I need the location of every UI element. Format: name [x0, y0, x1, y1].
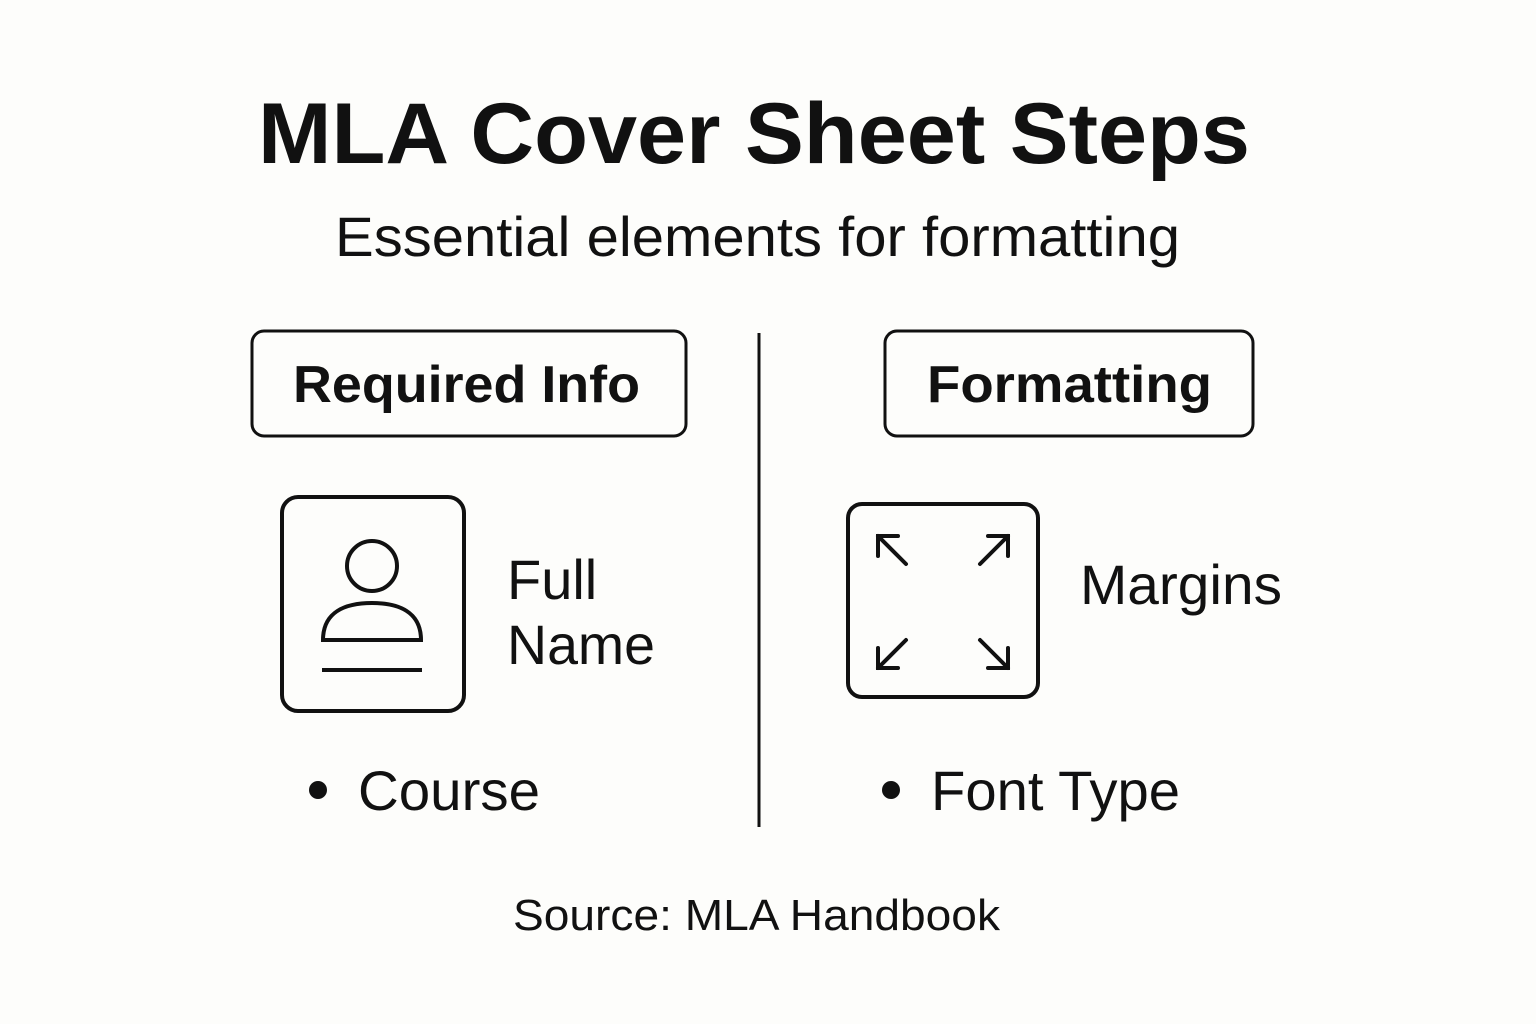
title: MLA Cover Sheet Steps: [258, 86, 1250, 182]
label: Full Name: [507, 548, 655, 676]
icon: person card: [282, 497, 464, 711]
heading box: Formatting: Formatting: [927, 356, 1212, 414]
icon: margins: [848, 504, 1038, 697]
subtitle: Essential elements for formatting: [335, 205, 1180, 268]
source: Source: MLA Handbook: [513, 891, 1001, 940]
heading box: Formatting: [885, 331, 1253, 436]
panel: formatting: [848, 331, 1282, 822]
label: Full Name: Full: [507, 548, 597, 611]
label: Full Name: Name: [507, 613, 655, 676]
panel: required info: [252, 331, 686, 822]
divider: [758, 333, 760, 827]
heading box: Required Info: Required Info: [293, 356, 640, 414]
heading box: Required Info: [252, 331, 686, 436]
bullet: Course: Course: [358, 759, 540, 822]
bullet: Font Type: Font Type: [931, 759, 1180, 822]
label: Margins: Margins: [1080, 553, 1282, 616]
